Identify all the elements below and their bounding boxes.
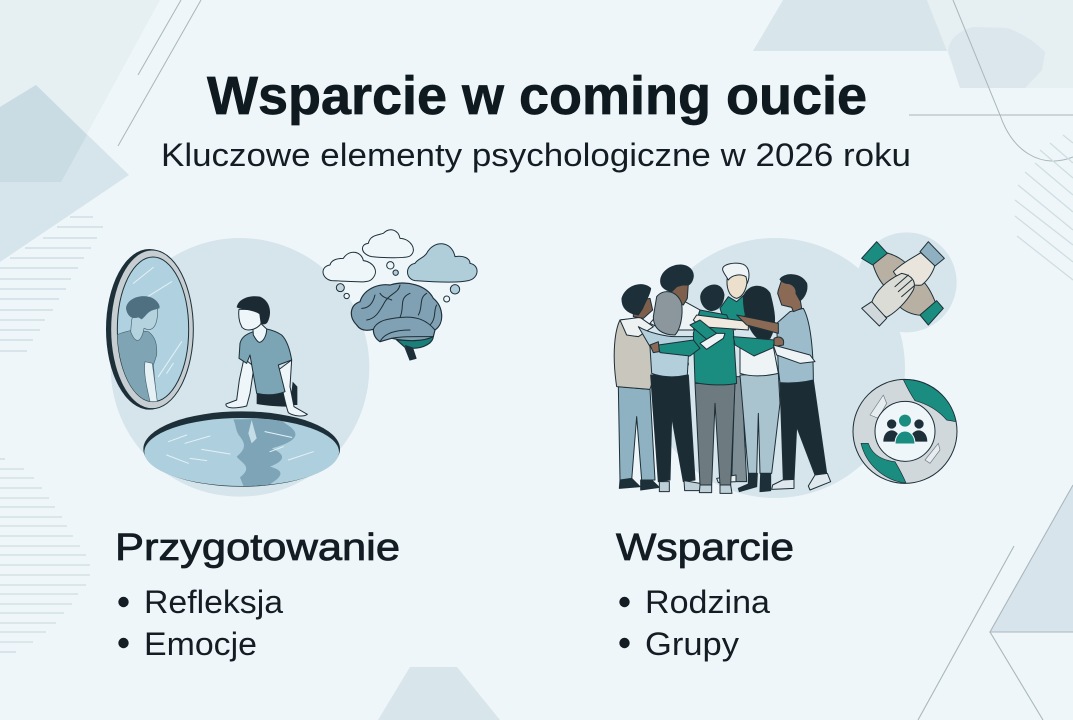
icon: community circle with hands <box>853 379 957 483</box>
bullet item: Refleksja: Refleksja <box>144 584 283 620</box>
background geometry: top right <box>753 0 1073 280</box>
heading: Przygotowanie: Przygotowanie <box>115 527 400 569</box>
backdrop circle <box>111 238 369 497</box>
person: curly hair at the back <box>650 265 700 330</box>
background geometry: lower left stripes <box>0 459 90 652</box>
icon: boy leaning over the water <box>226 296 307 416</box>
bullet item: Rodzina: Rodzina <box>645 584 770 620</box>
person: long dark hair seen from behind <box>738 286 780 492</box>
icon: mirror <box>106 249 193 410</box>
backdrop circles <box>645 232 957 498</box>
illustration: self-reflection <box>106 230 477 497</box>
section: Przygotowanie <box>115 527 400 662</box>
background geometry: bottom trapezoid <box>378 667 500 720</box>
background geometry: top left <box>0 0 201 351</box>
title: Wsparcie w coming oucie <box>207 66 867 126</box>
bullet item: Emocje: Emocje <box>144 626 257 662</box>
bullet item: Grupy: Grupy <box>645 626 739 662</box>
person: far left in beige jacket <box>614 285 688 490</box>
icon: brain <box>351 283 442 360</box>
heading: Wsparcie: Wsparcie <box>616 527 794 569</box>
icon: stacked hands <box>862 242 944 326</box>
illustration: group hug <box>614 232 957 498</box>
subtitle: Kluczowe elementy psychologiczne w 2026 roku <box>161 137 911 173</box>
icon: thought clouds <box>323 230 477 302</box>
person: grey hair seen from behind <box>638 292 702 492</box>
group arms <box>650 315 815 363</box>
icon: pool of water <box>140 411 343 490</box>
person: teal shirt seen from behind <box>693 285 737 493</box>
background geometry: bottom right <box>918 485 1073 720</box>
section: Wsparcie <box>616 527 794 662</box>
person: right with blue shirt <box>772 275 831 490</box>
person: man with white hair facing forward <box>717 263 749 483</box>
